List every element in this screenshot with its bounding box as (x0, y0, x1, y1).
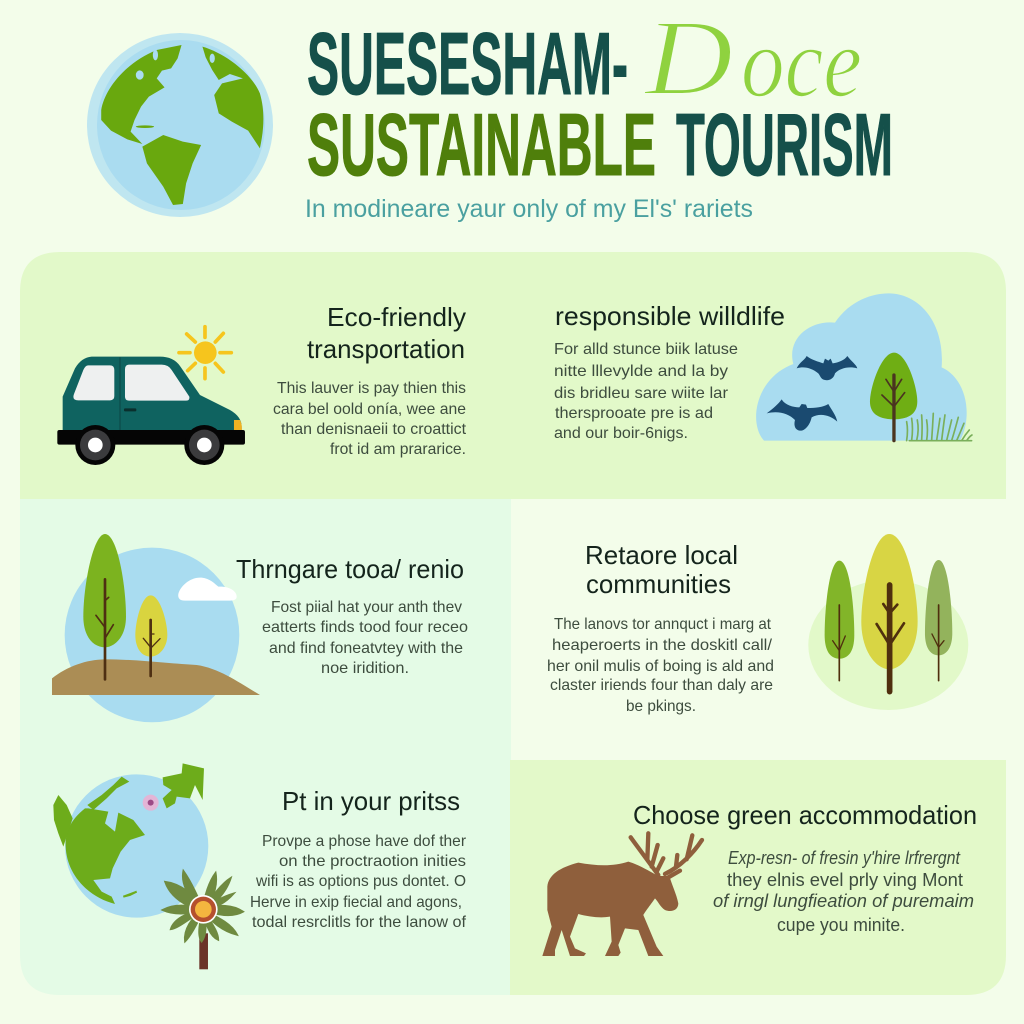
text: wildlife body: For alld stunce biik latuse (554, 341, 738, 358)
text: part body: Provpe a phose have dof ther (262, 833, 467, 850)
title: SUESESHAM- (307, 14, 628, 113)
text: transportation body: This lauver is pay thien this (277, 380, 466, 397)
text: transportation body (273, 380, 467, 458)
text: transportation body: cara bel oold onía, wee ane (273, 401, 466, 418)
text: transportation body: frot id am prararice. (330, 441, 466, 458)
heading: local communities: communities (586, 569, 731, 599)
title: oce (741, 7, 862, 118)
text: local food body: and find foneatvtey with the (269, 640, 463, 657)
heading: eco-friendly transportation: transportation (307, 334, 465, 364)
icon: trees on hill (52, 534, 260, 722)
heading: eco-friendly transportation (307, 302, 466, 364)
icon: cloud, birds and tree (756, 293, 972, 441)
text: part body (250, 833, 467, 931)
text: communities body (547, 616, 774, 715)
text: part body: todal resrclitls for the lanow of (252, 914, 467, 931)
panel: choose green accommodation (542, 800, 977, 956)
title: SUSTAINABLE (307, 95, 656, 194)
heading: local food: Thrngare tooa/ renio (236, 554, 464, 584)
text: wildlife body (554, 341, 738, 442)
panel: eco-friendly transportation (57, 302, 467, 465)
text: part body: wifi is as options pus dontet. O (255, 873, 466, 890)
subtitle: In modineare yaur only of my El's' rariets (305, 195, 753, 223)
icon: deer (542, 833, 702, 956)
icon: car and sun (57, 327, 245, 465)
heading: local communities: Retaore local (585, 540, 738, 570)
text: local food body: noe iridition. (321, 660, 409, 677)
text: accommodation body: they elnis evel prly ving Mont (727, 870, 963, 890)
text: accommodation body: cupe you minite. (777, 915, 905, 935)
heading: responsible wildlife: responsible willdlife (555, 301, 785, 331)
text: part body: Herve in exip fiecial and agons, (250, 894, 462, 911)
icon: globe, arrow and flower (53, 763, 243, 969)
heading: choose green accommodation: Choose green accommodation (633, 800, 977, 830)
icon: globe (87, 33, 273, 217)
text: local food body: eatterts finds tood four receo (262, 619, 468, 636)
heading: local communities (585, 540, 738, 599)
text: wildlife body: thersprooate pre is ad (555, 405, 713, 422)
text: communities body: claster iriends four than daly are (550, 677, 773, 694)
text: communities body: The lanovs tor annquct i marg at (554, 616, 772, 633)
text: local food body: Fost piial hat your anth thev (271, 599, 462, 616)
panel: responsible wildlife (554, 293, 972, 442)
text: accommodation body (713, 848, 974, 935)
text: wildlife body: nitte lllevylde and la by (554, 363, 728, 380)
text: wildlife body: and our boir-6nigs. (554, 425, 688, 442)
title: D (643, 0, 733, 118)
panel: bottom-right background (510, 760, 1006, 995)
title (307, 0, 893, 194)
panel: local food (52, 534, 468, 722)
panel: bottom-left background (20, 499, 511, 995)
heading: eco-friendly transportation: Eco-friendly (327, 302, 466, 332)
panel: put in your part (53, 763, 467, 969)
icon: three trees (808, 534, 968, 710)
heading: put in your part: Pt in your pritss (282, 786, 460, 816)
text: part body: on the proctraotion inities (279, 853, 466, 870)
text: transportation body: than denisnaeii to croattict (281, 421, 467, 438)
text: wildlife body: dis bridleu sare wiite lar (554, 385, 729, 402)
text: accommodation body: Exp-resn- of fresin y'hire lrfrergnt (728, 848, 961, 868)
text: accommodation body: of irngl lungfieation of puremaim (713, 891, 974, 911)
panel: local communities (547, 534, 968, 715)
text: communities body: be pkings. (626, 698, 696, 715)
text: communities body: heaperoerts in the doskitl call/ (552, 637, 773, 654)
panel: top band (20, 252, 1006, 499)
text: communities body: her onil mulis of boing is ald and (547, 658, 774, 675)
text: local food body (262, 599, 468, 677)
